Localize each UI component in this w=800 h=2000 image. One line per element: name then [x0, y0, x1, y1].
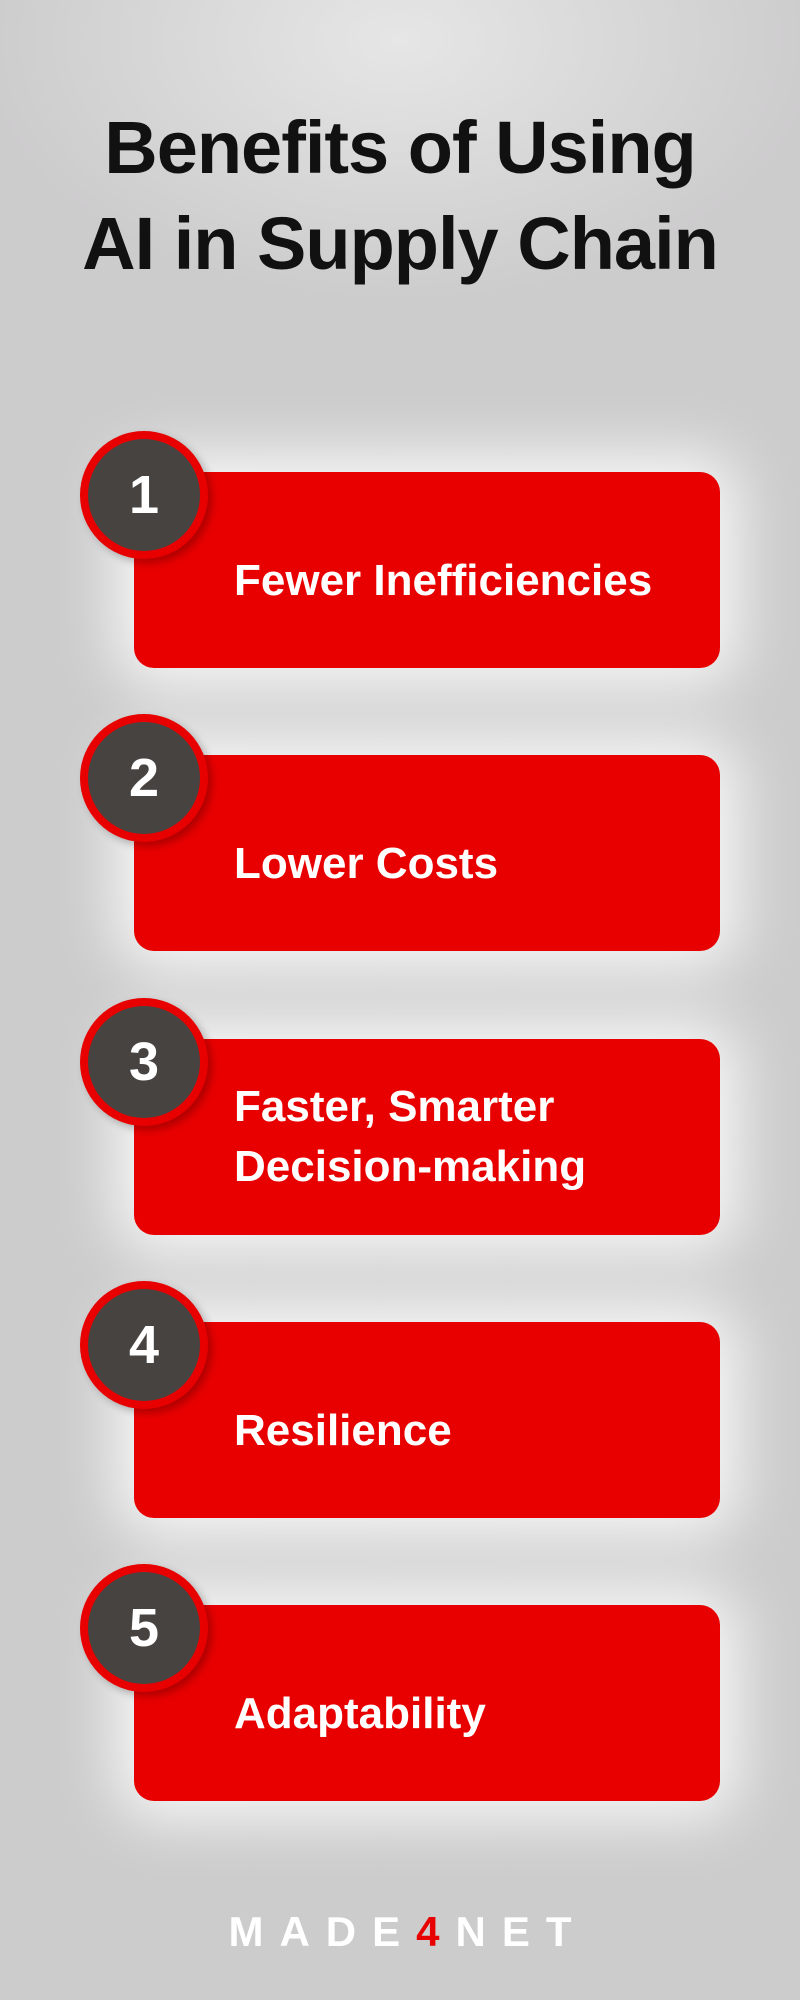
badge 1: [80, 431, 208, 559]
badge 1: 1: [129, 465, 159, 525]
card 3: Faster, Smarter: [234, 1082, 554, 1131]
title: Benefits of Using: [104, 106, 696, 189]
badge 3: [80, 998, 208, 1126]
card 2: Lower Costs: [234, 839, 498, 888]
card 3: [134, 1039, 720, 1235]
logo: MADE4NET: [228, 1908, 588, 1955]
badge 4: 4: [129, 1315, 159, 1375]
card 2: [134, 755, 720, 951]
badge 5: 5: [129, 1598, 159, 1658]
card 5: Adaptability: [234, 1689, 486, 1738]
badge 3: 3: [129, 1032, 159, 1092]
card 5: [134, 1605, 720, 1801]
card 1: [134, 472, 720, 668]
badge 2: 2: [129, 748, 159, 808]
badge 5: [80, 1564, 208, 1692]
title: [82, 106, 718, 285]
card 4: Resilience: [234, 1406, 452, 1455]
title: AI in Supply Chain: [82, 202, 718, 285]
badge 2: [80, 714, 208, 842]
card 4: [134, 1322, 720, 1518]
badge 4: [80, 1281, 208, 1409]
card 3: Decision-making: [234, 1142, 586, 1191]
card 1: Fewer Inefficiencies: [234, 556, 652, 605]
